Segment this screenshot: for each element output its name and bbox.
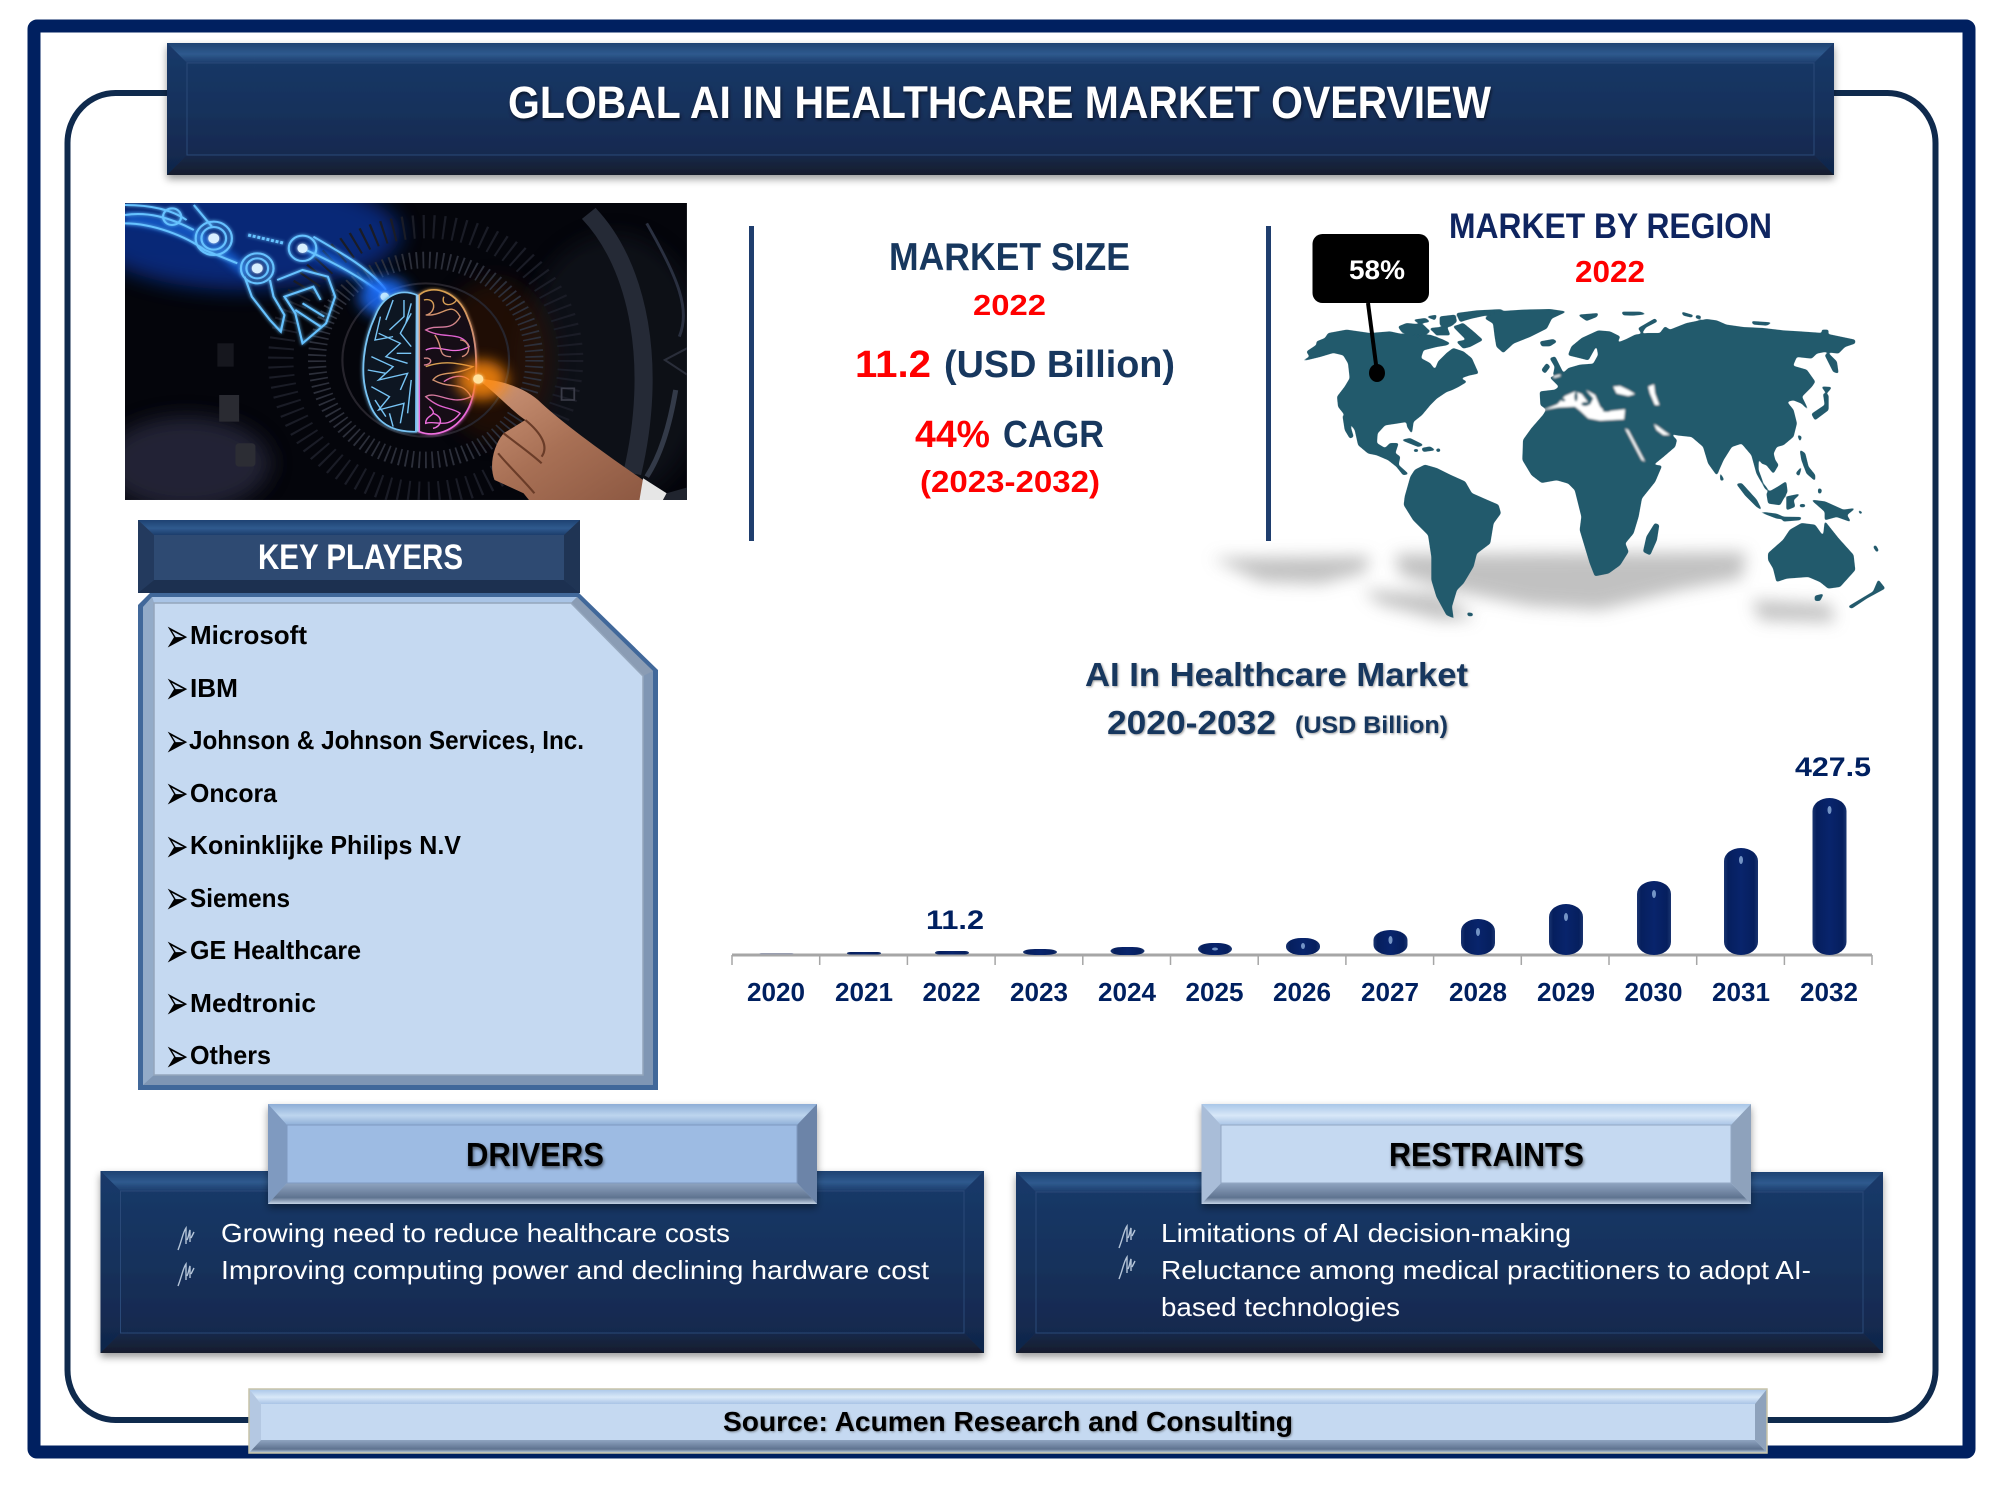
divider: market size bbox=[749, 226, 754, 541]
panel: drivers bbox=[100, 1104, 984, 1353]
player: GE Healthcare: ➢ bbox=[164, 925, 189, 979]
callout: 58% North America bbox=[1312, 234, 1429, 382]
drivers heading box: DRIVERS bbox=[466, 1136, 604, 1173]
source bar: Source: Acumen Research and Consulting bbox=[723, 1406, 1293, 1437]
callout: 58% North America: 58% bbox=[1349, 255, 1405, 285]
chart title: 2020-2032 bbox=[1107, 704, 1276, 741]
player: Oncora bbox=[164, 767, 278, 821]
player: Others: Others bbox=[190, 1040, 271, 1070]
player: Medtronic: Medtronic bbox=[190, 988, 316, 1018]
year labels: 2020 bbox=[747, 977, 805, 1007]
bars bbox=[760, 798, 1846, 955]
year labels: 2024 bbox=[1098, 977, 1157, 1007]
divider: market by region bbox=[1266, 226, 1271, 541]
market size heading: MARKET SIZE bbox=[889, 236, 1130, 279]
player: Oncora: ➢ bbox=[164, 767, 189, 821]
player: Siemens: Siemens bbox=[190, 883, 290, 913]
restraints heading box: RESTRAINTS bbox=[1389, 1136, 1584, 1173]
year labels: 2023 bbox=[1010, 977, 1068, 1007]
player: Oncora: Oncora bbox=[190, 778, 278, 808]
driver item 2: Improving computing power and declining hardware cost bbox=[221, 1255, 930, 1285]
CAGR period: (2023-2032) bbox=[920, 464, 1100, 499]
hand bbox=[482, 379, 643, 500]
title text: GLOBAL AI IN HEALTHCARE MARKET OVERVIEW bbox=[508, 77, 1491, 128]
chart title bbox=[1085, 656, 1468, 741]
year labels: 2026 bbox=[1273, 977, 1331, 1007]
player: Medtronic bbox=[164, 977, 316, 1031]
year labels bbox=[747, 977, 1858, 1007]
year labels: 2022 bbox=[922, 977, 980, 1007]
region heading: MARKET BY REGION bbox=[1449, 207, 1772, 246]
photo: robot hand and human finger touching a glowing brain bbox=[125, 203, 687, 500]
arm bbox=[125, 218, 386, 295]
key players title: KEY PLAYERS bbox=[258, 538, 463, 577]
player: Koninklijke Philips: ➢ bbox=[164, 820, 189, 874]
restraint item 2: based technologies bbox=[1161, 1292, 1400, 1322]
market size year: 2022 bbox=[973, 290, 1046, 322]
brain bbox=[363, 290, 476, 434]
CAGR value: 44% bbox=[915, 414, 990, 456]
player: Others: ➢ bbox=[164, 1030, 189, 1084]
restraint item 1: Limitations of AI decision-making bbox=[1161, 1218, 1571, 1248]
region year: 2022 bbox=[1575, 254, 1645, 289]
world map bbox=[1212, 234, 1885, 622]
player: Johnson & Johnson: Johnson & Johnson Services, Inc. bbox=[189, 725, 584, 755]
player: Siemens bbox=[164, 872, 290, 926]
market size block bbox=[855, 236, 1175, 499]
player: Others bbox=[164, 1030, 271, 1084]
year labels: 2027 bbox=[1361, 977, 1419, 1007]
player: Johnson & Johnson bbox=[164, 715, 584, 769]
title banner bbox=[167, 43, 1834, 175]
chart axis bbox=[732, 954, 1872, 965]
panel: key players list bbox=[138, 593, 658, 1090]
source bar bbox=[249, 1389, 1767, 1453]
market size value: 11.2 bbox=[855, 344, 931, 386]
year labels: 2029 bbox=[1537, 977, 1595, 1007]
player: Johnson & Johnson: ➢ bbox=[164, 715, 189, 769]
restraint item 2: Reluctance among medical practitioners to adopt AI- bbox=[1161, 1255, 1811, 1285]
driver item 1: Growing need to reduce healthcare costs bbox=[221, 1218, 730, 1248]
player: IBM bbox=[164, 662, 238, 716]
chart title: (USD Billion) bbox=[1295, 712, 1448, 739]
player: GE Healthcare bbox=[164, 925, 361, 979]
year labels: 2032 bbox=[1800, 977, 1858, 1007]
CAGR label: CAGR bbox=[1003, 414, 1104, 456]
value label 2022: 11.2 bbox=[926, 905, 984, 935]
player: GE Healthcare: GE Healthcare bbox=[190, 935, 361, 965]
year labels: 2025 bbox=[1186, 977, 1244, 1007]
panel: restraints bbox=[1016, 1104, 1883, 1353]
player: Microsoft: ➢ bbox=[164, 610, 189, 664]
value label 2032: 427.5 bbox=[1795, 752, 1871, 782]
player: Siemens: ➢ bbox=[164, 872, 189, 926]
drivers heading box bbox=[268, 1104, 817, 1204]
year labels: 2021 bbox=[835, 977, 893, 1007]
player: IBM: ➢ bbox=[164, 662, 189, 716]
key players header bbox=[138, 520, 580, 593]
player: IBM: IBM bbox=[190, 673, 238, 703]
bar chart bbox=[732, 752, 1872, 1007]
chart title: AI In Healthcare Market bbox=[1085, 656, 1468, 693]
player: Microsoft bbox=[164, 610, 307, 664]
market size unit: (USD Billion) bbox=[944, 344, 1175, 386]
player: Koninklijke Philips bbox=[164, 820, 462, 874]
player: Microsoft: Microsoft bbox=[190, 620, 307, 650]
year labels: 2028 bbox=[1449, 977, 1507, 1007]
player: Koninklijke Philips: Koninklijke Philips N.V bbox=[190, 830, 462, 860]
restraint item 2 bbox=[1119, 1255, 1811, 1322]
year labels: 2030 bbox=[1624, 977, 1682, 1007]
player: Medtronic: ➢ bbox=[164, 977, 189, 1031]
restraints heading box bbox=[1202, 1104, 1751, 1204]
year labels: 2031 bbox=[1712, 977, 1770, 1007]
